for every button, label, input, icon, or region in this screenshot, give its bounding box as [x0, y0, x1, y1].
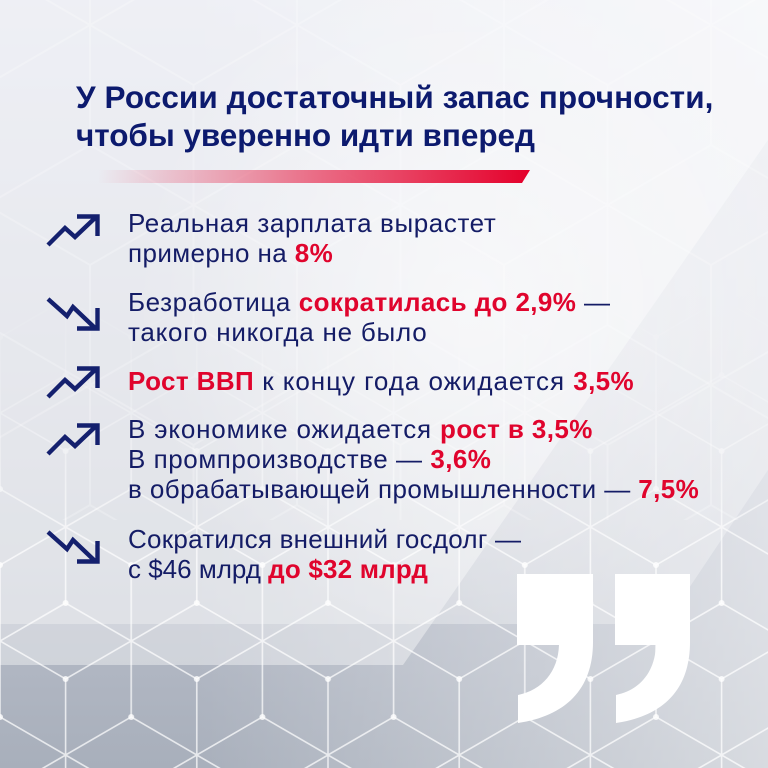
icon: arrow down [46, 530, 100, 564]
list item: unemployment [46, 287, 610, 347]
title [76, 79, 713, 152]
list item: GDP growth [46, 366, 634, 398]
text: unemployment: Безработица сократилась до 2,9% — [128, 287, 610, 317]
icon: arrow down [46, 297, 100, 331]
list item: economy growth [46, 414, 699, 504]
title: чтобы уверенно идти вперед [76, 116, 535, 152]
text: economy growth: В промпроизводстве — 3,6% [128, 444, 491, 474]
icon: arrow up [46, 423, 100, 456]
text: economy growth [128, 414, 699, 504]
icon: arrow up [46, 366, 100, 398]
text: external debt: Сократился внешний госдолг — [128, 524, 521, 554]
text: real wages: примерно на 8% [128, 238, 333, 268]
accent bar [112, 170, 530, 183]
text: external debt [128, 524, 521, 584]
list item: real wages [46, 208, 496, 268]
text: GDP growth: Рост ВВП к концу года ожидается 3,5% [128, 366, 634, 396]
text: real wages [128, 208, 496, 268]
title: У России достаточный запас прочности, [76, 79, 713, 115]
text: economy growth: в обрабатывающей промышленности — 7,5% [128, 474, 699, 504]
text: external debt: с $46 млрд до $32 млрд [128, 554, 428, 584]
text: real wages: Реальная зарплата вырастет [128, 208, 496, 238]
text: unemployment [128, 287, 610, 347]
text: economy growth: В экономике ожидается рост в 3,5% [128, 414, 593, 444]
icon: arrow up [46, 214, 100, 246]
list item: external debt [46, 524, 521, 584]
text: unemployment: такого никогда не было [128, 317, 427, 347]
